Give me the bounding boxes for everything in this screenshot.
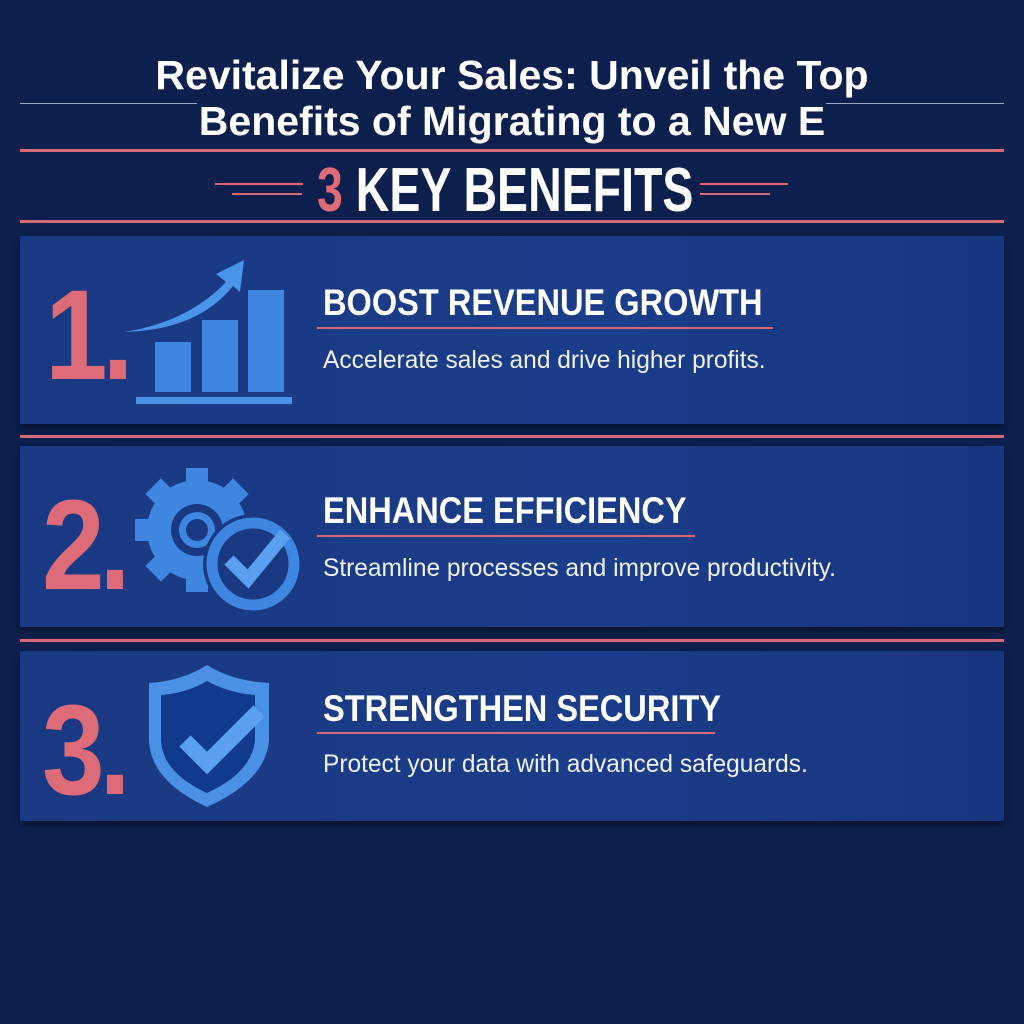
number 3: 3. bbox=[42, 679, 125, 822]
title: Revitalize Your Sales: Unveil the Top bbox=[155, 52, 869, 98]
description: Protect your data with advanced safeguards. bbox=[323, 750, 808, 778]
heading: BOOST REVENUE GROWTH bbox=[323, 282, 763, 323]
icon: bar chart with arrow bbox=[124, 260, 292, 404]
number 1: 1. bbox=[45, 264, 128, 407]
panel: strengthen security bbox=[20, 651, 1004, 821]
heading: ENHANCE EFFICIENCY bbox=[323, 490, 687, 531]
title: Benefits of Migrating to a New E bbox=[199, 98, 825, 144]
number 2: 2. bbox=[42, 474, 125, 617]
icon: shield with check bbox=[149, 665, 269, 807]
description: Accelerate sales and drive higher profits. bbox=[323, 346, 766, 374]
icon: gear with check bbox=[135, 468, 300, 610]
subtitle: 3 key benefits: 3 KEY BENEFITS bbox=[317, 156, 693, 225]
panel: enhance efficiency bbox=[20, 446, 1004, 627]
title bbox=[155, 52, 869, 144]
heading: STRENGTHEN SECURITY bbox=[323, 688, 721, 729]
description: Streamline processes and improve productivity. bbox=[323, 554, 836, 582]
panel: boost revenue growth bbox=[20, 236, 1004, 424]
